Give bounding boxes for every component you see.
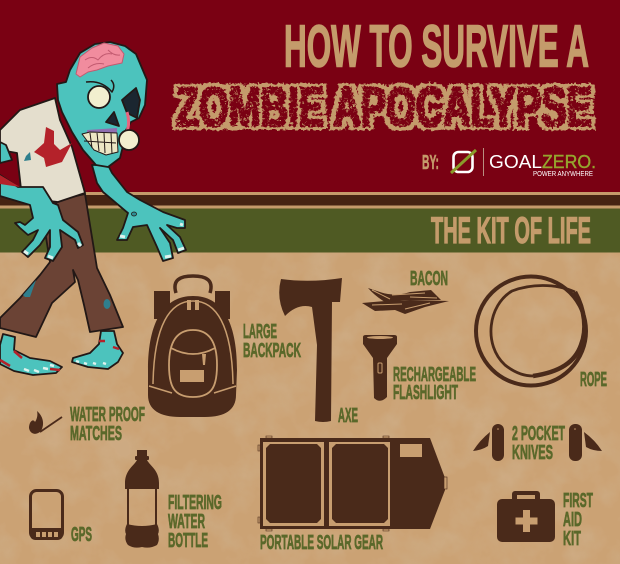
zombie right arm and hand <box>92 165 186 261</box>
zombie nose cavity <box>106 112 119 126</box>
Goal Zero logo: GOAL <box>489 152 542 172</box>
dangling eyeball <box>119 130 139 150</box>
Goal Zero logo: ZERO. <box>542 152 596 172</box>
zombie eye socket <box>122 88 140 118</box>
label: bacon: BACON <box>410 268 448 290</box>
water proof matches icon <box>29 411 62 434</box>
zombie trousers <box>0 194 123 337</box>
label: filtering water bottle <box>168 492 222 552</box>
zombie exposed brain <box>76 43 124 77</box>
large backpack icon <box>148 276 237 417</box>
label: 2 pocket knives <box>512 423 565 464</box>
Goal Zero logo: POWER ANYWHERE <box>533 171 593 178</box>
axe icon <box>279 278 342 422</box>
label: rechargeable flashlight: FLASHLIGHT <box>393 382 458 404</box>
zombie left foot <box>0 334 62 375</box>
label: filtering water bottle: BOTTLE <box>168 530 208 552</box>
zombie gum <box>87 128 117 134</box>
shirt blood stain <box>34 127 72 167</box>
zombie head <box>57 42 147 167</box>
zombie brow <box>86 80 114 92</box>
text: PORTABLE SOLAR GEAR <box>260 532 383 554</box>
label: filtering water bottle: WATER <box>168 511 205 533</box>
label: 2 pocket knives: 2 POCKET <box>512 423 565 445</box>
brown divider band <box>0 192 620 208</box>
portable solar gear icon <box>258 436 447 531</box>
zombie shirt <box>0 98 85 202</box>
label: first aid kit: AID <box>563 509 582 531</box>
filtering water bottle icon <box>125 450 159 548</box>
brain folds <box>85 50 120 68</box>
label: large backpack: BACKPACK <box>243 340 301 362</box>
zombie right foot <box>72 331 123 369</box>
label: filtering water bottle: FILTERING <box>168 492 222 514</box>
dangling eye stalk <box>125 112 129 136</box>
zombie illustration <box>0 42 186 375</box>
text: AXE <box>338 405 358 427</box>
text: GPS <box>71 524 92 546</box>
label: first aid kit: KIT <box>563 528 581 550</box>
label: large backpack: LARGE <box>243 321 277 343</box>
olive section band <box>0 208 620 252</box>
by label: BY: <box>422 152 439 174</box>
label: large backpack <box>243 321 301 362</box>
gps icon <box>30 490 63 540</box>
tan textured background <box>0 252 620 564</box>
label: first aid kit: FIRST <box>563 490 593 512</box>
pocket knives icons <box>473 424 602 461</box>
bacon icon <box>362 288 449 314</box>
label: water proof matches: MATCHES <box>70 423 122 445</box>
label: first aid kit <box>563 490 593 550</box>
red header panel <box>0 0 620 192</box>
zombie teeth <box>82 132 118 155</box>
zombie eye <box>88 86 110 108</box>
rechargeable flashlight icon <box>363 335 397 401</box>
text: RECHARGEABLE <box>393 364 476 386</box>
Goal Zero logo <box>451 148 596 178</box>
label: water proof matches: WATER PROOF <box>70 404 145 426</box>
rope icon <box>476 276 586 386</box>
zombie left arm stub <box>0 142 12 163</box>
zombie left arm and hand <box>0 175 83 261</box>
first aid kit icon <box>497 491 555 542</box>
label: water proof matches <box>70 404 145 445</box>
label: 2 pocket knives: KNIVES <box>512 442 553 464</box>
label: rechargeable flashlight <box>393 364 476 404</box>
